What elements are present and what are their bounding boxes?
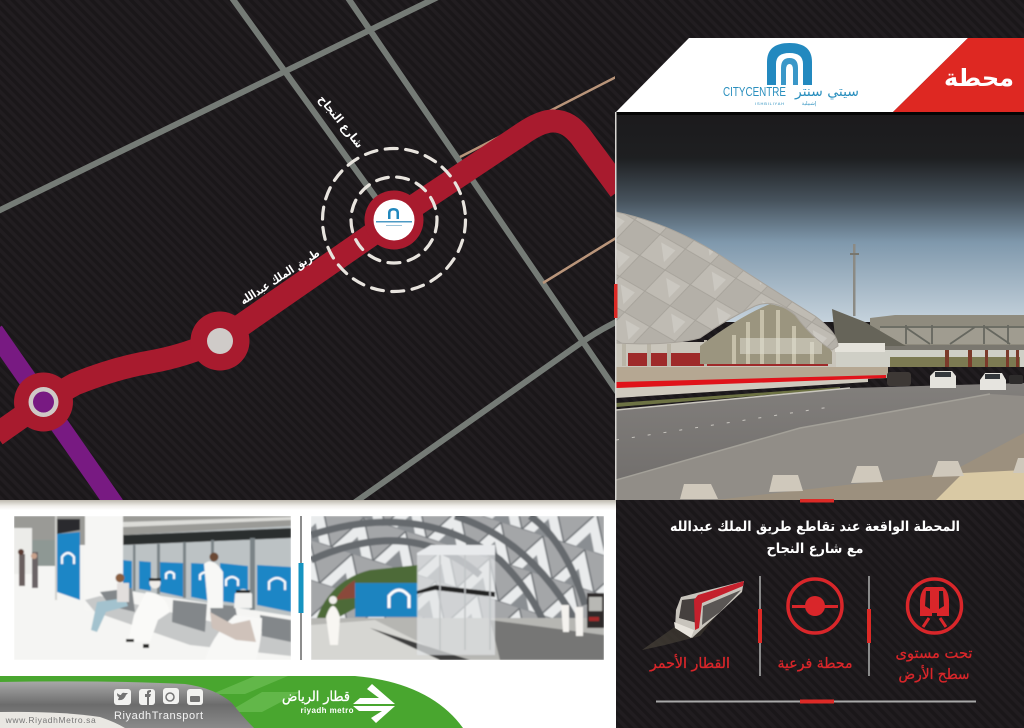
pedestrian bridge bbox=[832, 309, 1024, 367]
blue sign bbox=[355, 583, 418, 617]
road surface bbox=[616, 383, 1024, 479]
red edge marker bbox=[614, 284, 618, 318]
divider left bbox=[758, 576, 762, 676]
header banner bbox=[616, 38, 1024, 112]
label: street Al Najah: شارع النجاح bbox=[316, 92, 367, 151]
footer band bbox=[0, 676, 463, 728]
glass lift bbox=[417, 545, 495, 655]
top shading bbox=[0, 500, 616, 510]
description heading bbox=[670, 519, 960, 557]
man in jeans bbox=[91, 574, 129, 632]
description heading: مع شارع النجاح bbox=[766, 541, 864, 557]
pavement bbox=[716, 433, 1024, 500]
station structure base bbox=[616, 340, 885, 367]
red line bbox=[0, 121, 620, 435]
edge light of photo bbox=[615, 112, 616, 500]
bench base bbox=[85, 596, 291, 656]
icon: branch station bbox=[788, 579, 842, 633]
ceiling bbox=[14, 516, 291, 545]
station: intermediate bbox=[190, 312, 250, 370]
website: www.RiyadhMetro.sa bbox=[5, 715, 96, 725]
far wall bbox=[32, 540, 57, 566]
station: interchange bbox=[14, 372, 73, 432]
white background bbox=[0, 500, 616, 728]
photo: platform seating bbox=[14, 516, 291, 660]
metro name latin: riyadh metro bbox=[300, 706, 354, 715]
metro name arabic: قطار الرياض bbox=[282, 689, 350, 705]
label: underground: سطح الأرض bbox=[898, 665, 970, 683]
picture: red train bbox=[642, 581, 744, 650]
station: city centre bbox=[364, 190, 424, 250]
photo: concourse bbox=[311, 516, 604, 660]
logo marks bbox=[62, 553, 285, 590]
man with newspaper bbox=[205, 589, 262, 660]
divider right bbox=[867, 576, 871, 676]
divider between photos bbox=[298, 516, 304, 660]
white corner bbox=[0, 712, 125, 728]
top marker bbox=[800, 499, 834, 502]
label: underground bbox=[896, 646, 972, 683]
dome shell bbox=[616, 212, 838, 350]
people standing bbox=[18, 549, 38, 588]
label: branch station: محطة فرعية bbox=[778, 656, 852, 672]
label: underground: تحت مستوى bbox=[896, 646, 972, 662]
dashed rings bbox=[322, 148, 466, 292]
logo chevrons bbox=[212, 676, 300, 712]
red station tag bbox=[893, 38, 1024, 112]
social icons bbox=[114, 688, 203, 705]
logo: City Centre: إشبيلية bbox=[802, 101, 817, 107]
inner arch with ribs bbox=[700, 304, 832, 364]
green wall bbox=[316, 565, 418, 625]
blue column panel bbox=[57, 519, 80, 534]
logo: City Centre: سيتي سنتر bbox=[794, 84, 859, 100]
label: red line: القطار الأحمر bbox=[649, 654, 730, 672]
panel: route map bbox=[0, 0, 620, 505]
side streets bbox=[460, 77, 616, 283]
photo: station exterior bbox=[616, 158, 1024, 500]
verge bbox=[616, 378, 868, 398]
sky bbox=[616, 158, 1024, 322]
information kiosk bbox=[587, 593, 604, 628]
station wall bbox=[616, 367, 888, 390]
white logo band bbox=[616, 38, 968, 112]
seated man in thobe bbox=[126, 578, 170, 648]
description heading: المحطة الواقعة عند تقاطع طريق الملك عبدالله bbox=[670, 519, 960, 535]
platform void bbox=[490, 620, 604, 660]
logo: City Centre: ISHBILIYAH bbox=[755, 101, 785, 106]
bottom rule bbox=[656, 700, 976, 704]
platform doors bbox=[123, 526, 291, 616]
blue door panels bbox=[123, 560, 291, 612]
standing man bbox=[204, 552, 223, 608]
panel: station information bbox=[642, 499, 976, 704]
gray swoosh bbox=[0, 681, 254, 728]
icon: underground train bbox=[908, 579, 962, 633]
purple line bbox=[0, 331, 115, 505]
logo: City Centre bbox=[723, 43, 859, 107]
white column bbox=[84, 516, 124, 546]
label: King Abdullah road: طريق الملك عبدالله bbox=[237, 246, 322, 308]
green swoosh bbox=[0, 676, 463, 728]
people bbox=[326, 596, 583, 645]
metro logo bbox=[353, 684, 395, 723]
concrete bollards bbox=[680, 458, 1024, 499]
seats bbox=[100, 588, 291, 642]
logo: City Centre: CITYCENTRE bbox=[723, 85, 786, 99]
floor bbox=[311, 618, 604, 660]
station tag label: محطة bbox=[944, 64, 1014, 92]
roads bbox=[0, 0, 620, 503]
cars bbox=[887, 371, 1023, 390]
shadow above photo bbox=[616, 112, 1024, 115]
social handle: RiyadhTransport bbox=[114, 710, 203, 722]
red stripe bbox=[616, 375, 886, 388]
arches bbox=[311, 516, 585, 625]
panel: interior photos bbox=[0, 500, 616, 728]
lighting mast bbox=[850, 244, 859, 316]
